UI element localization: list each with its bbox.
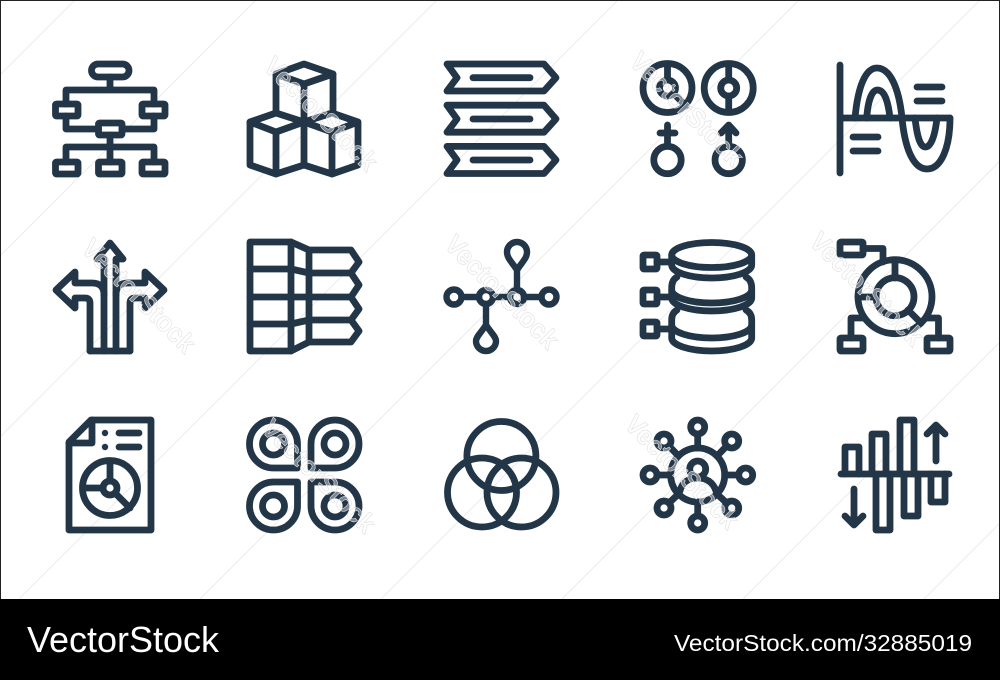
icon: three way arrows <box>56 243 164 351</box>
footer brand name: VectorStock <box>27 619 220 660</box>
watermark: VectorStock <box>619 409 745 536</box>
watermark: VectorStock <box>804 226 930 353</box>
watermark: VectorStock <box>258 51 384 178</box>
icon: folded table <box>250 242 359 351</box>
watermark: VectorStock <box>439 229 565 356</box>
icon: stacked cubes <box>250 64 358 174</box>
icon: diverging bar chart <box>841 420 949 530</box>
icon: donut with linked boxes <box>840 242 950 351</box>
icon: nodes with drops <box>446 242 556 351</box>
icon: three ribbon tags <box>447 64 556 174</box>
footer image url: VectorStock.com/32885019 <box>674 630 972 656</box>
watermark: VectorStock <box>624 46 750 173</box>
icon: database stack <box>643 242 752 351</box>
icon: pie charts with gender symbols <box>643 64 753 174</box>
icon: document with pie chart <box>69 420 151 530</box>
icon: person network <box>643 420 753 530</box>
icon: wave chart <box>840 65 950 173</box>
footer bar <box>0 599 1000 680</box>
watermark <box>76 46 930 540</box>
watermark: VectorStock <box>256 413 382 540</box>
watermark: VectorStock <box>76 233 202 360</box>
icon: flowchart hierarchy <box>56 64 165 174</box>
icon: four petal clover <box>250 420 359 530</box>
icon: venn diagram <box>448 422 556 527</box>
